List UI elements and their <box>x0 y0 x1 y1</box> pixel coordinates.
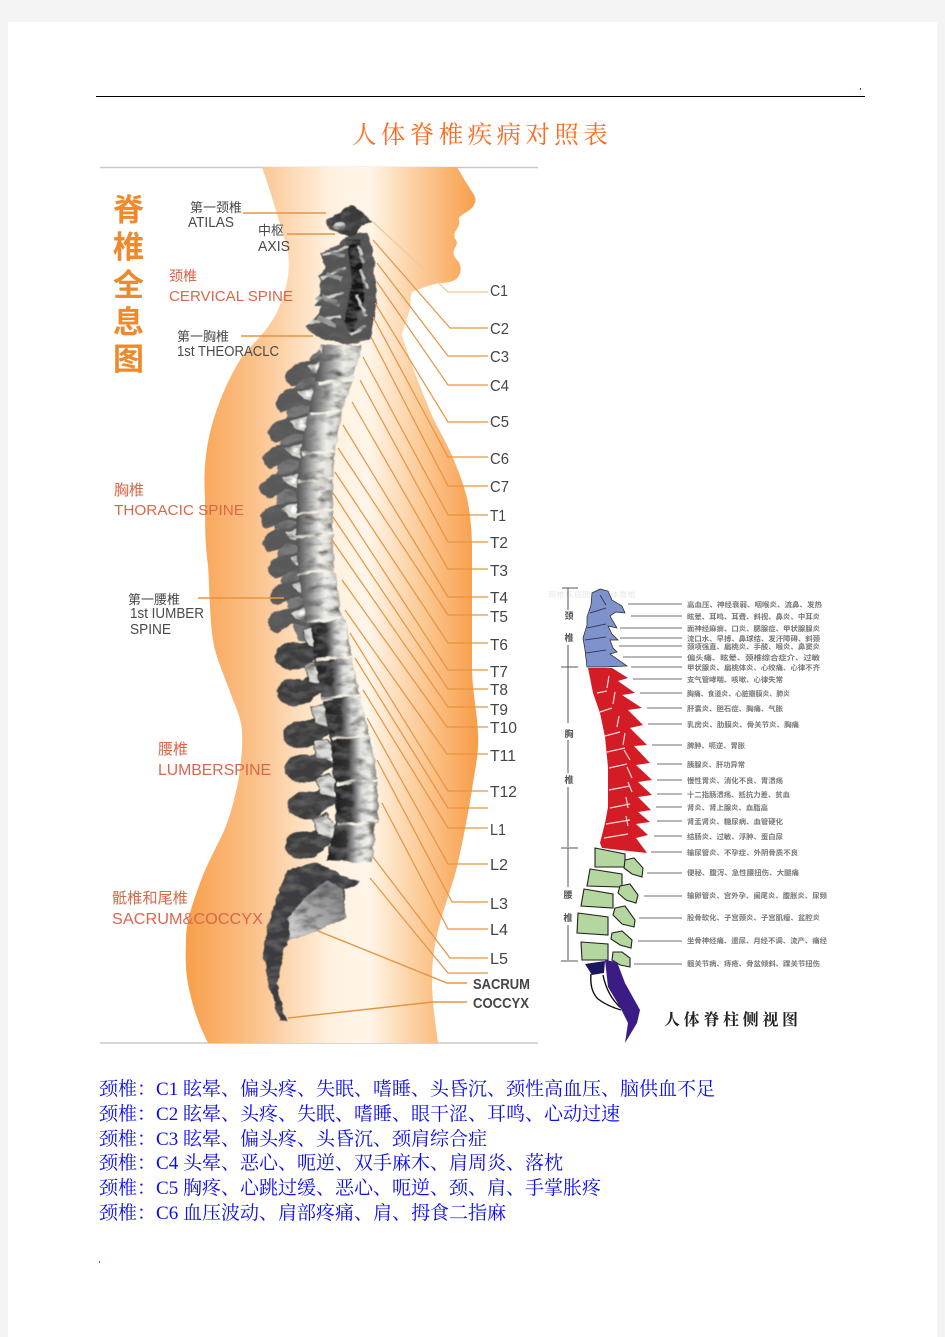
condition list: 肝囊炎、胆石症、胸痛、气胀 <box>687 704 783 714</box>
disease list text: C1 <box>156 1079 178 1100</box>
section labels: 颈 <box>564 611 574 621</box>
anatomical labels: 1st THEORACLC <box>177 343 279 360</box>
title: 人体脊椎疾病对照表 <box>352 122 612 149</box>
condition list <box>687 600 827 969</box>
level labels <box>473 283 530 1012</box>
level labels: T5 <box>490 609 508 626</box>
vertical heading: 图 <box>113 342 144 377</box>
level labels: T1 <box>490 508 506 525</box>
vertical heading <box>113 193 144 377</box>
condition list: 输尿管炎、不孕症、外阴骨质不良 <box>687 848 798 858</box>
level labels: C2 <box>490 321 509 338</box>
vertical heading: 息 <box>113 305 144 340</box>
region labels: 胸椎 <box>114 482 144 499</box>
level labels: T7 <box>490 664 508 681</box>
thoracic and lumbar processes <box>260 355 343 859</box>
disease list text: 颈椎： 血压波动、肩部疼痛、肩、拇食二指麻 <box>99 1203 506 1224</box>
level labels: L3 <box>490 896 508 913</box>
vertebral bodies <box>296 345 378 863</box>
side diagram caption: 人体脊柱侧视图 <box>664 1007 798 1030</box>
level labels: C5 <box>490 414 509 431</box>
cervical vertebrae <box>306 205 377 345</box>
condition list: 甲状腺炎、扁桃体炎、心绞痛、心律不齐 <box>687 663 820 673</box>
sacrum and coccyx <box>263 863 360 1022</box>
level labels: T6 <box>490 637 508 654</box>
region labels: 腰椎 <box>158 741 188 758</box>
level labels: C6 <box>490 451 509 468</box>
section scale <box>561 588 578 961</box>
disease list text: 颈椎： 眩晕、偏头疼、失眠、嗜睡、头昏沉、颈性高血压、脑供血不足 <box>99 1079 715 1100</box>
disease list text: 颈椎： 眩晕、偏头疼、头昏沉、颈肩综合症 <box>99 1129 487 1150</box>
header mark <box>860 88 861 90</box>
level labels: L4 <box>490 922 508 939</box>
anatomical labels: ATILAS <box>188 214 234 231</box>
anatomical labels: 第一腰椎 <box>128 592 180 607</box>
anatomical labels: 第一颈椎 <box>190 200 242 215</box>
condition list: 胸痛、食道炎、心脏瓣膜炎、肺炎 <box>687 689 790 699</box>
condition list: 股骨软化、子宫颈炎、子宫肌瘤、盆腔炎 <box>687 913 820 923</box>
condition list: 支气管哮喘、咳嗽、心律失常 <box>687 675 783 685</box>
disease list text: C6 <box>156 1203 178 1224</box>
disease list text: 颈椎： 头晕、恶心、呃逆、双手麻木、肩周炎、落枕 <box>99 1153 563 1174</box>
disease list text: C2 <box>156 1104 178 1125</box>
level labels: COCCYX <box>473 995 529 1012</box>
thoracic mass <box>276 345 325 640</box>
condition list: 结肠炎、过敏、浮肿、蛋白尿 <box>687 832 783 842</box>
header rule <box>96 96 865 97</box>
condition list: 肾炎、肾上腺炎、血脂高 <box>687 803 768 813</box>
level labels: C7 <box>490 479 509 496</box>
watermark: 颈椎疾病图解 人体脊椎 <box>548 589 637 599</box>
condition list: 髋关节病、痔疮、骨盆倾斜、踝关节扭伤 <box>687 959 820 969</box>
anatomical labels: 1st IUMBER <box>130 605 204 622</box>
region labels: THORACIC SPINE <box>114 502 244 519</box>
disease list text: C4 <box>156 1153 178 1174</box>
level labels: T11 <box>490 748 516 765</box>
level labels: L1 <box>490 822 506 839</box>
side spine diagram <box>548 588 827 1043</box>
condition list: 肾盂肾炎、糖尿病、血管硬化 <box>687 817 783 827</box>
condition list: 脾肿、呃逆、胃胀 <box>687 741 745 751</box>
region labels: 颈椎 <box>169 268 197 284</box>
level labels: L2 <box>490 857 508 874</box>
section labels <box>563 611 574 923</box>
level labels: T3 <box>490 563 508 580</box>
condition list: 高血压、神经衰弱、咽喉炎、流鼻、发热 <box>687 600 822 610</box>
anatomical labels <box>128 200 290 638</box>
level labels: C1 <box>490 283 508 300</box>
section labels: 椎 <box>564 632 574 643</box>
disease list text: C5 <box>156 1178 178 1199</box>
region labels: LUMBERSPINE <box>158 762 271 779</box>
disease list text: C3 <box>156 1129 178 1150</box>
condition list: 十二指肠溃疡、抵抗力差、贫血 <box>687 790 790 800</box>
condition list: 偏头痛、眩晕、颈椎综合症介、过敏 <box>687 653 820 663</box>
condition list: 坐骨神经痛、遗尿、月经不调、流产、痛经 <box>687 936 827 946</box>
condition list: 颈项强直、扁桃炎、手酸、喉炎、鼻窦炎 <box>687 642 820 652</box>
disease list text: 颈椎： 胸疼、心跳过缓、恶心、呃逆、颈、肩、手掌胀疼 <box>99 1178 601 1199</box>
section labels: 胸 <box>564 728 574 739</box>
region labels: SACRUM&COCCYX <box>112 911 263 928</box>
anatomical labels: AXIS <box>258 238 290 255</box>
vertical heading: 脊 <box>113 193 144 228</box>
condition list: 乳房炎、肋膜炎、骨关节炎、胸痛 <box>687 720 799 730</box>
level labels: C3 <box>490 349 509 366</box>
level labels: T12 <box>490 784 517 801</box>
red thoracic <box>588 668 652 853</box>
green lumbar <box>577 848 643 967</box>
discs <box>296 380 377 825</box>
section labels: 椎 <box>563 912 573 923</box>
section labels: 椎 <box>564 774 574 785</box>
condition list: 胰腺炎、肝功异常 <box>687 760 745 770</box>
anatomical labels: 第一胸椎 <box>177 329 229 344</box>
condition list: 慢性胃炎、消化不良、胃溃疡 <box>687 776 783 786</box>
region labels: 骶椎和尾椎 <box>112 890 188 907</box>
blue cervical <box>583 589 627 667</box>
anatomical labels: 中枢 <box>258 223 284 238</box>
region labels <box>112 268 293 928</box>
level labels: SACRUM <box>473 976 530 993</box>
level labels: T8 <box>490 682 508 699</box>
leader lines <box>619 604 682 964</box>
level labels: T2 <box>490 535 508 552</box>
condition list: 流口水、早搏、鼻球结、发汗障碍、斜颈 <box>687 634 820 644</box>
section labels: 腰 <box>563 890 573 900</box>
nerve lines <box>198 213 488 1018</box>
purple sacrum <box>585 960 640 1043</box>
anatomical labels: SPINE <box>130 621 171 638</box>
level labels: L5 <box>490 951 508 968</box>
vertical heading: 全 <box>113 268 144 303</box>
image frame lines <box>100 168 538 1043</box>
level labels: T9 <box>490 702 508 719</box>
condition list: 便秘、腹泻、急性腰扭伤、大腿痛 <box>687 868 799 878</box>
footer mark <box>99 1261 100 1263</box>
spine bones <box>260 205 378 1022</box>
level labels: T10 <box>490 720 517 737</box>
disease list text: 颈椎： 眩晕、头疼、失眠、嗜睡、眼干涩、耳鸣、心动过速 <box>99 1104 620 1125</box>
condition list: 面神经麻痹、口炎、腮腺症、甲状腺腺炎 <box>687 624 820 634</box>
disease list text <box>99 1078 715 1224</box>
level labels: T4 <box>490 590 508 607</box>
region labels: CERVICAL SPINE <box>169 288 293 305</box>
level labels: C4 <box>490 378 509 395</box>
condition list: 眩晕、耳鸣、耳聋、斜视、鼻炎、中耳炎 <box>687 612 820 622</box>
vertical heading: 椎 <box>113 230 144 265</box>
condition list: 输卵管炎、宫外孕、阑尾炎、腹胀炎、尿频 <box>687 891 827 901</box>
body silhouette <box>186 167 478 1043</box>
